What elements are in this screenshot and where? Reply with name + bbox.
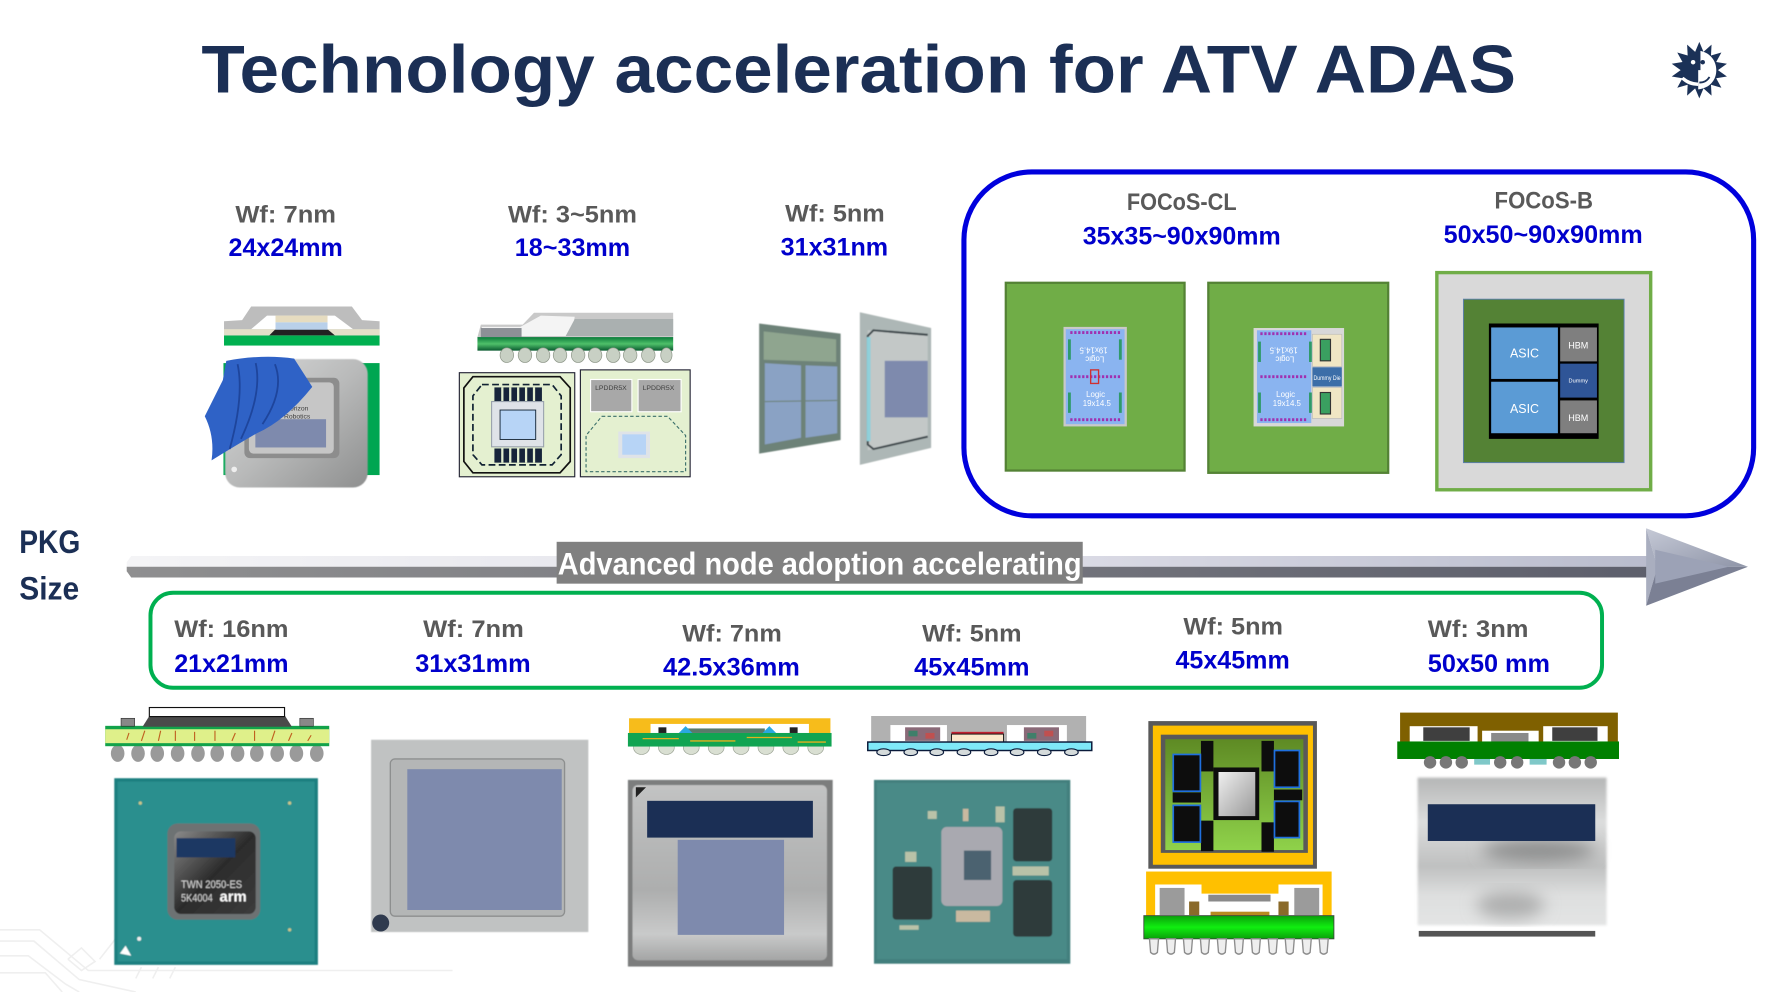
panel: FOCoS-B labels (1444, 188, 1643, 249)
cross section: bottom item 1 (105, 708, 329, 762)
diagram: FOCoS-CL single logic: Logic (1086, 390, 1105, 399)
diagram: FOCoS-CL logic with HBM: Dummy Die (1314, 375, 1341, 382)
diagram: FOCoS-CL logic with HBM: 19x14.5 (1273, 399, 1302, 408)
labels: 42.5x36mm: 42.5x36mm (663, 653, 800, 681)
axis label: PKG Size (19, 523, 80, 606)
labels: 50x50 mm (1428, 616, 1550, 678)
diagram: FOCoS-CL logic with HBM: 19x14.5 (1269, 345, 1298, 354)
diagram: FOCoS-B ASIC and HBM: HBM (1568, 340, 1588, 350)
diagram: FOCoS-B ASIC and HBM: Dummy (1569, 378, 1588, 384)
cross section: item 2 top (477, 313, 673, 363)
diagram: FOCoS-B ASIC and HBM: ASIC (1510, 346, 1539, 360)
cross section: bottom item 3 (628, 718, 832, 754)
diagram: FOCoS-B ASIC and HBM (1437, 273, 1651, 490)
diagram: bottom item 5 top view (1148, 721, 1317, 869)
photo: item 3 top package (860, 312, 931, 465)
labels: 31x31mm (415, 616, 531, 678)
labels: 42.5x36mm (663, 620, 800, 681)
labels: 50x50 mm: 50x50 mm (1428, 650, 1550, 678)
diagram: FOCoS-CL single logic: Logic (1085, 354, 1104, 363)
icon: sun face logo (1672, 42, 1727, 98)
panel: FOCoS-CL labels (1083, 189, 1281, 250)
panel: item 1 top labels (229, 201, 343, 262)
labels: 45x45mm: 45x45mm (914, 653, 1030, 681)
photo: bottom item 4 package (874, 780, 1070, 964)
background: faint circuit pattern (0, 928, 453, 992)
panel: FOCoS-B labels: FOCoS-B (1495, 188, 1593, 215)
photo: item 1 top covered package: Horizon (285, 406, 309, 413)
labels: 45x45mm second: Wf: 5nm (1183, 614, 1283, 641)
labels: 21x21mm: Wf: 16nm (174, 616, 289, 643)
diagram: FOCoS-CL logic with HBM (1208, 283, 1388, 473)
panel: item 1 top labels: 24x24mm (229, 234, 343, 262)
photo: bottom item 6 package (1418, 778, 1607, 937)
panel: item 3 top labels: Wf: 5nm (785, 201, 885, 228)
panel: mainstream package labels frame (150, 593, 1602, 688)
diagram: item 2 memory layout: LPDDR5X (595, 385, 627, 392)
panel: FOCoS advanced packages frame (964, 172, 1754, 516)
diagram: item 2 memory layout: LPDDR5X (643, 385, 675, 392)
cross section: bottom item 6 (1397, 713, 1619, 769)
axis label: PKG Size: Size (19, 570, 79, 606)
labels: 45x45mm second (1176, 614, 1290, 674)
panel: FOCoS-CL labels: FOCoS-CL (1127, 189, 1237, 216)
labels: 42.5x36mm: Wf: 7nm (682, 620, 782, 647)
diagram: FOCoS-CL single logic: 19x14.5 (1083, 399, 1111, 408)
labels: 21x21mm (174, 616, 289, 678)
labels: 45x45mm (914, 620, 1030, 681)
panel: item 2 top labels (508, 201, 637, 262)
labels: 45x45mm: Wf: 5nm (922, 620, 1022, 647)
panel: item 2 top labels: Wf: 3~5nm (508, 201, 637, 228)
photo: bottom item 1 teal package: arm (219, 890, 247, 906)
photo: item 3 top die (759, 324, 841, 454)
diagram: FOCoS-CL logic with HBM: Logic (1276, 390, 1295, 399)
photo: bottom item 1 teal package: TWN 2050-ES (181, 879, 243, 891)
panel: FOCoS-B labels: 50x50~90x90mm (1444, 221, 1643, 249)
photo: item 1 top covered package (205, 357, 380, 488)
arrow: advanced node timeline (127, 528, 1748, 606)
labels: 31x31mm: 31x31mm (415, 650, 531, 678)
diagram: FOCoS-CL logic with HBM: Logic (1275, 354, 1294, 363)
diagram: FOCoS-CL single logic: 19x14.5 (1079, 345, 1108, 354)
diagram: FOCoS-B ASIC and HBM: ASIC (1510, 402, 1539, 416)
panel: item 2 top labels: 18~33mm (515, 234, 630, 262)
arrow label: Advanced node adoption accelerating (558, 546, 1082, 582)
labels: 31x31mm: Wf: 7nm (423, 616, 524, 643)
diagram: FOCoS-B ASIC and HBM: HBM (1568, 413, 1588, 423)
photo: bottom item 1 teal package: 5K4004 (181, 893, 213, 905)
cross section: item 1 top (224, 307, 380, 346)
panel: item 3 top labels (781, 201, 888, 262)
photo: bottom item 1 teal package (114, 778, 318, 965)
panel: FOCoS-CL labels: 35x35~90x90mm (1083, 222, 1281, 250)
panel: item 1 top labels: Wf: 7nm (235, 201, 336, 228)
labels: 21x21mm: 21x21mm (174, 650, 289, 678)
cross section: bottom item 4 (868, 716, 1092, 756)
panel: item 3 top labels: 31x31nm (781, 234, 888, 262)
title: Technology acceleration for ATV ADAS (201, 33, 1516, 108)
axis label: PKG Size: PKG (19, 523, 80, 560)
photo: bottom item 2 silver package (371, 740, 588, 932)
diagram: FOCoS-CL single logic (1006, 283, 1185, 471)
photo: item 1 top covered package: Robotics (284, 414, 311, 421)
diagram: item 2 memory layout (580, 370, 690, 477)
labels: 45x45mm second: 45x45mm (1176, 646, 1290, 674)
cross section: bottom item 5 (1144, 872, 1334, 954)
diagram: item 2 substrate layout (459, 373, 575, 477)
photo: bottom item 3 package (628, 780, 833, 967)
labels: 50x50 mm: Wf: 3nm (1428, 616, 1528, 643)
